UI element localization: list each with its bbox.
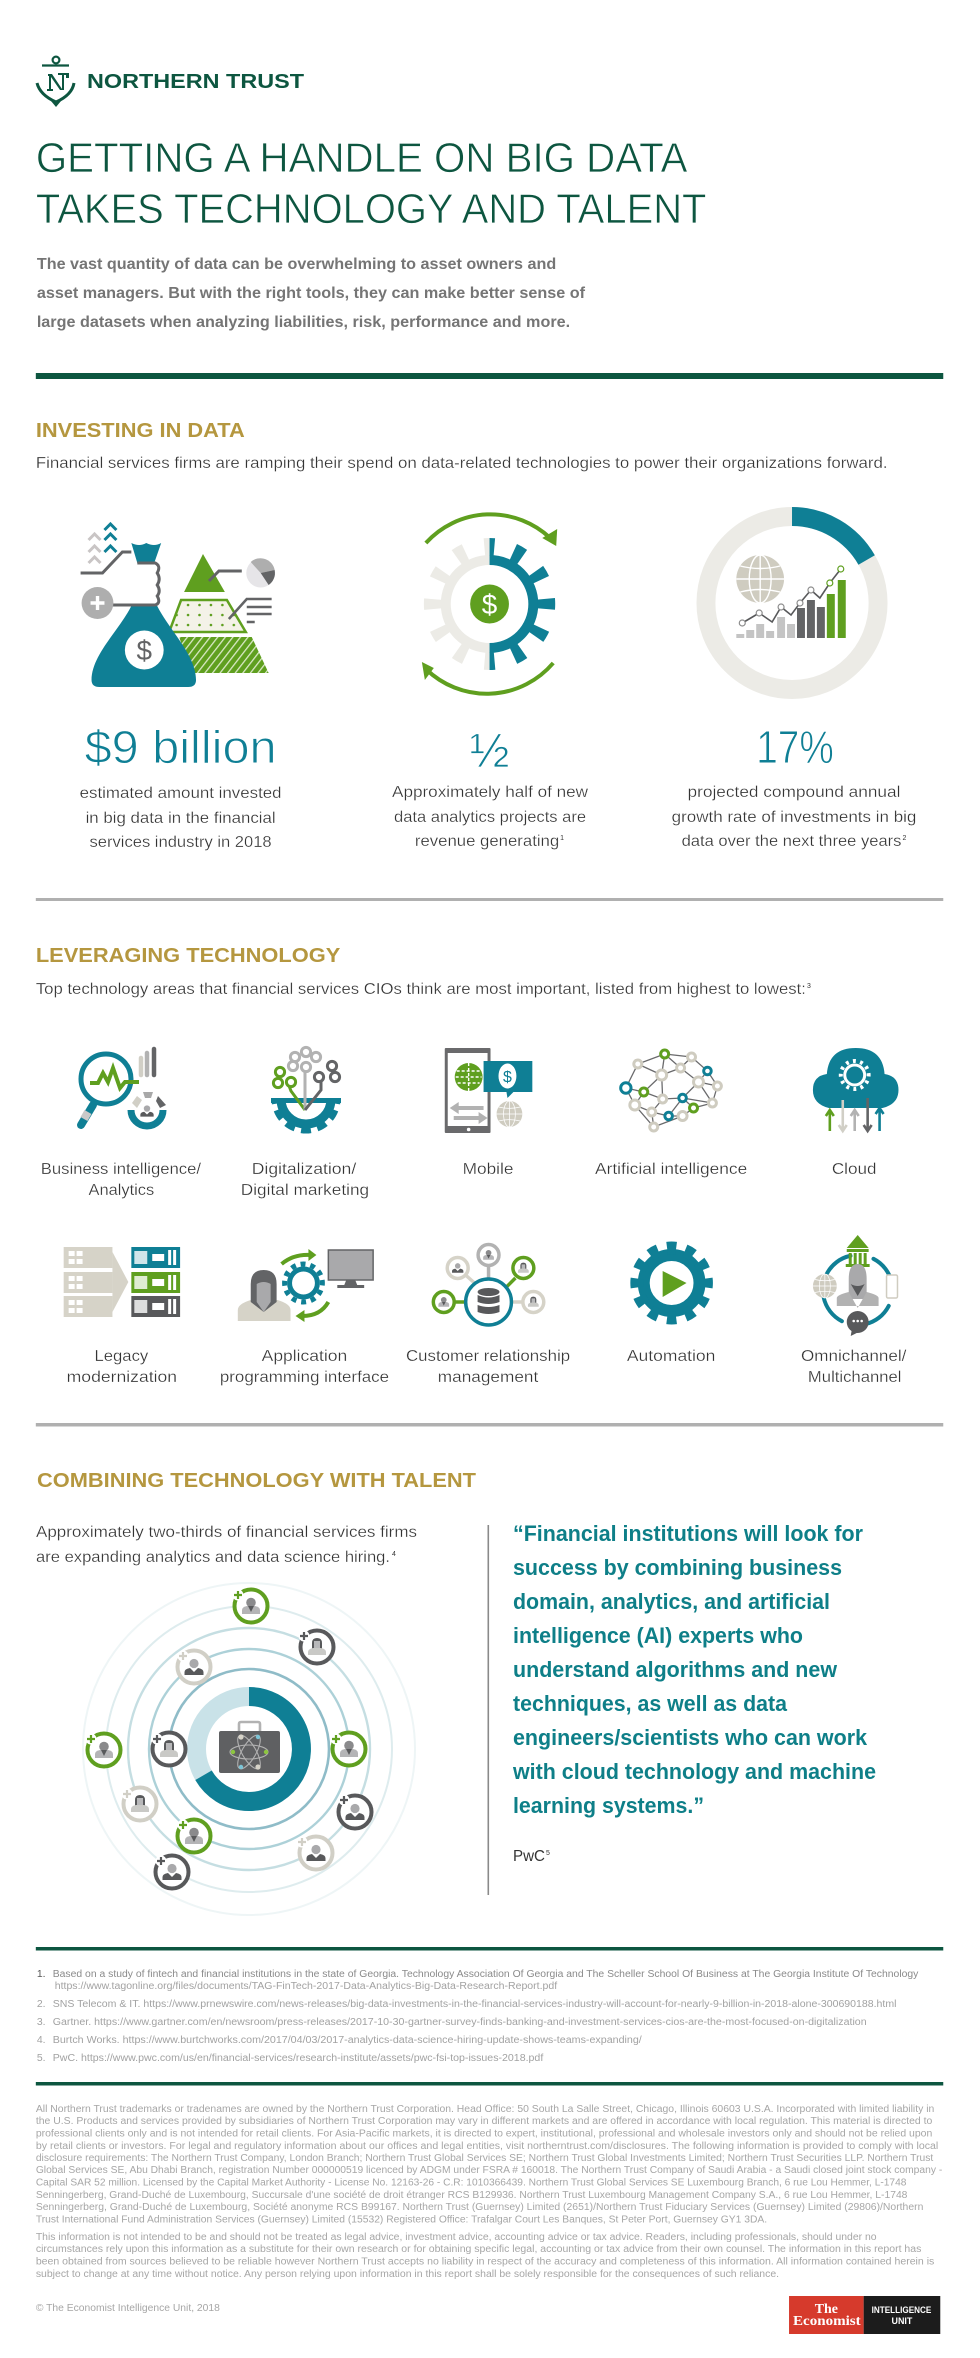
legal text: by retail clients or investors. For legal and regulatory information about our offices and legal entities, visit northerntrust.com/disclosures. The following information is provided to comply with local bbox=[36, 2141, 938, 2152]
stat: 17 percent: projected compound annual bbox=[688, 784, 900, 801]
legal text: Senningerberg, Grand-Duché de Luxembourg, Société anonyme RCS B99167. Northern Trust (Guernsey) Limited (2651)/Northern Trust Fiduciary Services (Guernsey) Limited (29806)/Northern bbox=[36, 2202, 924, 2213]
section intro: investing: Financial services firms are ramping their spend on data-related technologies to power their organizations forward. bbox=[36, 455, 888, 472]
label: digitalization: Digitalization/ bbox=[252, 1161, 357, 1178]
footnotes: Gartner. https://www.gartner.com/en/newsroom/press-releases/2017-10-30-gartner-survey-finds-banking-and-investment-services-cios-are-the-most-focused-on-digitalization bbox=[53, 2017, 867, 2028]
label: business intelligence: Business intelligence/ bbox=[41, 1161, 202, 1178]
heading: investing in data: INVESTING IN DATA bbox=[36, 420, 245, 442]
section intro: leveraging: Top technology areas that financial services CIOs think are most important, listed from highest to lowest: bbox=[36, 981, 806, 998]
quote: understand algorithms and new bbox=[513, 1657, 838, 1682]
stat: 17 percent: data over the next three years bbox=[682, 833, 902, 850]
small pie bbox=[246, 558, 275, 588]
icon: omnichannel bbox=[813, 1235, 897, 1336]
footnotes: Based on a study of fintech and financial institutions in the state of Georgia. Technology Association Of Georgia and The Scheller School Of Business at The Georgia Institute Of Technology bbox=[53, 1969, 919, 1980]
chevrons bbox=[89, 524, 116, 563]
footnotes: PwC. https://www.pwc.com/us/en/financial-services/research-institute/assets/pwc-fsi-top-issues-2018.pdf bbox=[53, 2053, 543, 2064]
label: legacy modernization: modernization bbox=[67, 1369, 177, 1386]
legal text: disclosure requirements: The Northern Trust Company, London Branch; Northern Trust Global Services SE; Northern Trust Global Investments Limited; Northern Trust Securities LLP. Northern Trust bbox=[36, 2153, 933, 2164]
stat: one half: Approximately half of new bbox=[392, 784, 589, 801]
stat: 17 percent bbox=[672, 721, 916, 850]
label: mobile: Mobile bbox=[463, 1161, 513, 1178]
section intro: combining: are expanding analytics and data science hiring. bbox=[36, 1549, 390, 1566]
plus circle bbox=[82, 587, 113, 619]
footnotes: 3. bbox=[37, 2017, 46, 2028]
label: legacy modernization bbox=[67, 1348, 177, 1386]
icon: 17 percent donut with chart bbox=[706, 516, 878, 690]
stat: one half: ½ bbox=[470, 725, 509, 778]
intro text bbox=[37, 256, 586, 331]
person nodes bbox=[88, 1590, 372, 1888]
rings bbox=[83, 1583, 415, 1915]
intro text: The vast quantity of data can be overwhelming to asset owners and bbox=[37, 256, 556, 273]
footnotes bbox=[37, 1969, 919, 2064]
label: artificial intelligence: Artificial intelligence bbox=[595, 1161, 747, 1178]
icon: customer relationship management bbox=[433, 1244, 544, 1325]
legal text: Capital SAR 52 million. Licensed by the Capital Market Authority - License No. 12163-26 - C.R: 1010366439. Northern Trust Global Services SE Luxembourg Branch, 6 rue Lou Hemmer, L-1748 bbox=[36, 2177, 907, 2189]
stat: one half: 1 bbox=[560, 835, 564, 842]
copyright: © The Economist Intelligence Unit, 2018 bbox=[36, 2303, 220, 2314]
intro text: large datasets when analyzing liabilities, risk, performance and more. bbox=[37, 314, 570, 331]
stat: $9 billion: services industry in 2018 bbox=[90, 834, 272, 851]
icon: half gear with arrows: $ bbox=[482, 589, 498, 620]
icon: cloud bbox=[813, 1048, 898, 1131]
stat: $9 billion: in big data in the financial bbox=[86, 810, 276, 827]
label: automation: Automation bbox=[627, 1348, 715, 1365]
bag bbox=[92, 606, 196, 687]
section intro: leveraging: 3 bbox=[807, 983, 811, 990]
label: digitalization: Digital marketing bbox=[241, 1182, 369, 1199]
label: business intelligence: Analytics bbox=[89, 1182, 155, 1199]
footnotes: 2. bbox=[37, 1999, 46, 2010]
footnotes: https://www.tagonline.org/files/documents/TAG-FinTech-2017-Data-Analytics-Big-Data-Research-Report.pdf bbox=[55, 1981, 557, 1992]
legal text: professional clients only and is not intended for retail clients. For Asia-Pacific markets, it is directed to expert, institutional, professional and wholesale investors only and should not be relied upon bbox=[36, 2128, 932, 2140]
icon: automation gear bbox=[637, 1248, 706, 1318]
label: application programming interface: Application bbox=[262, 1348, 347, 1365]
footnotes: Burtch Works. https://www.burtchworks.com/2017/04/03/2017-analytics-data-science-hiring-update-shows-teams-expanding/ bbox=[53, 2035, 642, 2046]
quote bbox=[512, 1521, 876, 1818]
title: TAKES TECHNOLOGY AND TALENT bbox=[36, 185, 706, 232]
logo: The Economist Intelligence Unit bbox=[789, 2296, 940, 2334]
quote: domain, analytics, and artificial bbox=[513, 1589, 830, 1614]
legal text: Global Services SE, Abu Dhabi Branch, registration Number 000000519 licenced by ADGM under FSRA # 160018. The Northern Trust Company of Saudi Arabia - a Saudi closed joint stock company - bbox=[36, 2165, 943, 2176]
legal text: been obtained from sources believed to be reliable however Northern Trust accepts no liability in respect of the accuracy and completeness of this information. All information contained herein is bbox=[36, 2256, 934, 2268]
title bbox=[36, 134, 706, 232]
legal text: All Northern Trust trademarks or tradenames are owned by the Northern Trust Corporation. Head Office: 50 South La Salle Street, Chicago, Illinois 60603 U.S.A. Incorporated with limited liability in bbox=[36, 2104, 934, 2115]
title: GETTING A HANDLE ON BIG DATA bbox=[36, 134, 688, 181]
stat: 17 percent: 2 bbox=[902, 835, 906, 842]
quote: learning systems.” bbox=[513, 1793, 704, 1818]
legal text: the U.S. Products and services provided by subsidiaries of Northern Trust Corporation may vary in different markets and are offered in accordance with local regulation. This material is directed to bbox=[36, 2116, 932, 2127]
logo: The Economist Intelligence Unit: UNIT bbox=[892, 2316, 913, 2326]
footnotes: 5. bbox=[37, 2053, 46, 2064]
icon: mobile: $ bbox=[503, 1069, 512, 1086]
section intro: combining: 4 bbox=[392, 1551, 396, 1558]
legal text: Senningerberg, Grand-Duché de Luxembourg, Succursale d'une société de droit étranger RCS B129936. Northern Trust Luxembourg Management Company S.A., 6 rue Lou Hemmer, L-1748 bbox=[36, 2190, 908, 2201]
logo: The Economist Intelligence Unit: The bbox=[815, 2302, 838, 2317]
stat: 17 percent: growth rate of investments in big bbox=[672, 809, 916, 826]
heading: leveraging technology: LEVERAGING TECHNOLOGY bbox=[36, 945, 340, 967]
briefcase bbox=[219, 1722, 280, 1773]
quote attribution: 5 bbox=[546, 1850, 550, 1857]
dollar bbox=[125, 630, 164, 670]
legal text: Trust International Fund Administration Services (Guernsey) Limited (15532) Registered Office: Trafalgar Court Les Banques, St Peter Port, Guernsey GY1 3DA. bbox=[36, 2214, 767, 2226]
label: application programming interface bbox=[220, 1348, 389, 1386]
icon: legacy modernization bbox=[64, 1247, 180, 1317]
label: application programming interface: programming interface bbox=[220, 1369, 389, 1386]
icon: money bag and pyramid: $ bbox=[137, 635, 152, 666]
stat: $9 billion: estimated amount invested bbox=[80, 785, 282, 802]
footnotes: SNS Telecom & IT. https://www.prnewswire.com/news-releases/big-data-investments-in-the-financial-services-industry-will-account-for-nearly-9-billion-in-2018-alone-300690188.html bbox=[53, 1999, 896, 2010]
icon: digitalization bbox=[271, 1047, 341, 1129]
pyramid bbox=[184, 554, 225, 592]
logo: The Economist Intelligence Unit: Economist bbox=[793, 2314, 861, 2329]
quote: intelligence (AI) experts who bbox=[513, 1623, 803, 1648]
donut bbox=[196, 1696, 302, 1802]
label: customer relationship management: Customer relationship bbox=[406, 1348, 570, 1365]
icon: application programming interface bbox=[238, 1249, 373, 1322]
stat: $9 billion: $9 billion bbox=[85, 721, 277, 773]
quote: engineers/scientists who can work bbox=[513, 1725, 868, 1750]
label: omnichannel bbox=[801, 1348, 907, 1386]
label: legacy modernization: Legacy bbox=[95, 1348, 149, 1365]
icon: half gear with arrows bbox=[422, 514, 557, 694]
footnotes: 4. bbox=[37, 2035, 46, 2046]
legal text: This information is not intended to be and should not be treated as legal advice, investment advice, accounting advice or tax advice. Readers, including professionals, should under no bbox=[36, 2232, 877, 2243]
chart: talent rings with two-thirds donut bbox=[83, 1583, 415, 1915]
quote: with cloud technology and machine bbox=[512, 1759, 876, 1784]
heading: combining technology with talent: COMBINING TECHNOLOGY WITH TALENT bbox=[37, 1469, 476, 1492]
quote: techniques, as well as data bbox=[513, 1691, 788, 1716]
logo: The Economist Intelligence Unit: INTELLIGENCE bbox=[872, 2305, 931, 2315]
stat: one half: revenue generating bbox=[415, 833, 559, 850]
stat: one half: data analytics projects are bbox=[394, 809, 586, 826]
label: omnichannel: Omnichannel/ bbox=[801, 1348, 907, 1365]
legal text: subject to change at any time without notice. Any person relying upon information in this report shall be solely responsible for the consequences of such reliance. bbox=[36, 2269, 779, 2280]
icon: money bag and pyramid bbox=[81, 524, 275, 687]
logo: Northern Trust bbox=[37, 57, 305, 107]
quote attribution: PwC bbox=[513, 1848, 545, 1865]
label: customer relationship management bbox=[406, 1348, 570, 1386]
icon: business intelligence bbox=[81, 1049, 166, 1126]
hand bbox=[81, 552, 131, 573]
label: business intelligence bbox=[41, 1161, 202, 1199]
logo: Northern Trust: NORTHERN TRUST bbox=[87, 70, 305, 93]
section intro: combining bbox=[36, 1524, 417, 1566]
section intro: combining: Approximately two-thirds of financial services firms bbox=[36, 1524, 417, 1541]
list lines bbox=[229, 599, 272, 622]
stat: 17 percent: 17% bbox=[756, 721, 834, 773]
legal text bbox=[36, 2104, 943, 2280]
quote: success by combining business bbox=[513, 1555, 842, 1580]
quote: “Financial institutions will look for bbox=[513, 1521, 863, 1546]
stat: one half bbox=[392, 725, 589, 850]
intro text: asset managers. But with the right tools, they can make better sense of bbox=[37, 285, 586, 302]
green arrows bbox=[426, 514, 553, 694]
footnotes: 1. bbox=[37, 1969, 46, 1980]
plus badges bbox=[86, 1590, 350, 1866]
label: omnichannel: Multichannel bbox=[808, 1369, 901, 1386]
legal text: circumstances rely upon this information as a substitute for their own research or for obtaining specific legal, accounting or tax advice from their own counsel. The information in this report has bbox=[36, 2244, 921, 2255]
label: cloud: Cloud bbox=[832, 1161, 877, 1178]
icon: mobile bbox=[445, 1048, 532, 1133]
label: customer relationship management: management bbox=[438, 1369, 539, 1386]
stat: $9 billion bbox=[80, 721, 282, 851]
icon: artificial intelligence bbox=[621, 1050, 721, 1131]
label: digitalization bbox=[241, 1161, 369, 1199]
